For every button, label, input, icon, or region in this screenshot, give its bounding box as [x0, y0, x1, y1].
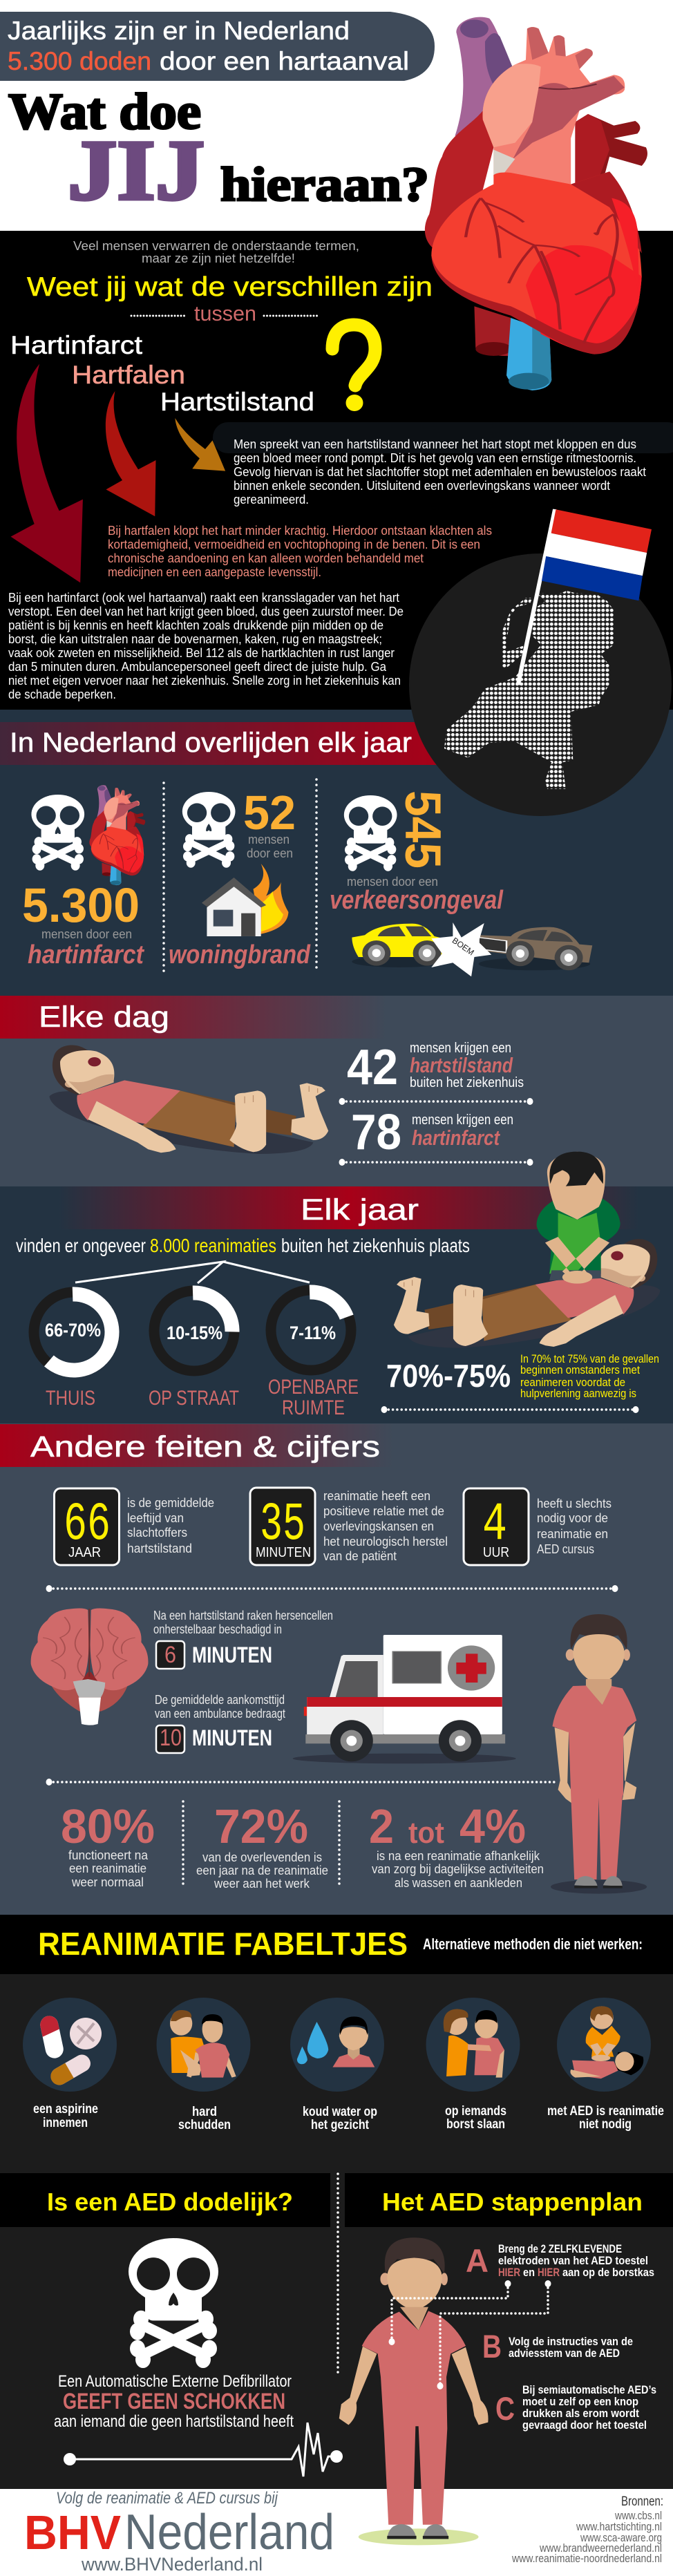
text: ambulance arrival: van een ambulance bedraagt: [155, 1707, 285, 1721]
icon: dotted map of the Netherlands: [444, 591, 614, 789]
stat: 2 tot 4%: als wassen en aankleden: [395, 1876, 522, 1890]
text block: hartinfarct: Bij een hartinfarct (ook wel hartaanval) raakt een kransslagader van het hart: [8, 591, 399, 605]
stat: 80%: weer normaal: [71, 1875, 144, 1889]
dotted divider: [381, 1406, 638, 1413]
logo: BHVNederland: [24, 2505, 334, 2560]
arrow: to hartinfarct text: [11, 364, 83, 583]
background: black AED heading strip right: [345, 2173, 673, 2227]
icon: small heart: [89, 785, 145, 885]
fact text: resuscitation start: het neurologisch herstel: [323, 1535, 448, 1549]
arrow: to hartstilstand text: [175, 418, 225, 471]
donut chart: thuis: [34, 1292, 114, 1372]
illustration: person lying on back: [49, 1045, 328, 1154]
step A: Breng de 2 ZELFKLEVENDE: [498, 2242, 622, 2255]
illustration: CPR on person: [394, 1152, 661, 1348]
icon: Dutch flag on pole: [516, 509, 652, 685]
icon: burning house: [202, 864, 288, 936]
number: 5.300: 5.300: [22, 878, 140, 932]
text block: hartfalen: [108, 524, 492, 579]
donut chart: openbare ruimte: 7-11%: [290, 1323, 336, 1343]
cause: verkeersongeval: verkeersongeval: [330, 886, 504, 915]
step C: [495, 2383, 656, 2432]
myth label: aspirine: een aspirine: [33, 2102, 98, 2116]
stat: 2 tot 4%: 4%: [459, 1799, 526, 1853]
myth label: AED: niet nodig: [579, 2117, 632, 2132]
vertical dotted divider: [336, 2174, 339, 2377]
myth circle: aspirine: [23, 1998, 117, 2092]
sources: [511, 2494, 663, 2565]
fact: 35 minuten: MINUTEN: [256, 1545, 311, 1560]
caption: mensen door een: [41, 927, 132, 941]
background: navy yearly panel: [0, 1186, 673, 1423]
myth circle: AED: [557, 1998, 651, 2092]
sentence: resuscitations per year: 8.000 reanimaties: [150, 1235, 276, 1256]
time box: 10 minuten: MINUTEN: [192, 1725, 272, 1750]
stat: 2 tot 4%: tot: [408, 1816, 444, 1850]
stat: 72%: 72%: [214, 1799, 308, 1853]
arrow: to hartfalen text: [106, 391, 155, 516]
stat: 78 hartinfarct: [351, 1105, 513, 1160]
fact text: course length: nodig voor de: [537, 1511, 608, 1525]
stat: 70%-75%: 70%-75%: [386, 1358, 511, 1394]
myth label: aspirine: [33, 2102, 98, 2130]
step C: drukken als erom wordt: [522, 2407, 639, 2420]
label: openbare ruimte: RUIMTE: [282, 1396, 345, 1419]
stat: 2 tot 4%: 2: [369, 1799, 394, 1853]
dark pill behind hartstilstand text: [213, 422, 673, 453]
label: openbare ruimte: OPENBARE: [268, 1376, 359, 1399]
connector lines: [75, 1262, 310, 1283]
main title: JIJ: [68, 123, 205, 218]
stat: 80%: functioneert na: [68, 1848, 149, 1862]
heading banner: deaths per year: [0, 722, 442, 765]
illustration: standing nurse: [551, 1614, 647, 1894]
number: 78: 78: [351, 1105, 401, 1160]
stat: 72%: van de overlevenden is: [202, 1850, 322, 1864]
label: op straat: OP STRAAT: [149, 1387, 239, 1410]
heading: In Nederland overlijden elk jaar: In Nederland overlijden elk jaar: [10, 728, 412, 758]
main title: Wat doe: [8, 84, 201, 140]
vertical dotted dividers: [183, 1801, 339, 1888]
step A: en: [523, 2266, 535, 2279]
step B: Volg de instructies van de: [509, 2335, 633, 2348]
stat: 2 tot 4%: van zorg bij dagelijkse activiteiten: [372, 1862, 544, 1876]
banner line two rest: door een hartaanval: [160, 47, 409, 75]
time box: 6 minuten: [156, 1641, 272, 1669]
icon: two people shaking: [170, 2010, 236, 2078]
text: bystanders start CPR: hulpverlening aanwezig is: [520, 1387, 636, 1400]
stat: 80%: een reanimatie: [69, 1862, 146, 1875]
text block: hartstilstand: geen bloed meer rond pompt. Dit is het gevolg van een ernstige ritmestoornis.: [234, 451, 636, 465]
fact: 66 jaar: [54, 1488, 119, 1565]
text: bystanders start CPR: reanimeren voordat de: [520, 1376, 625, 1389]
text block: hartinfarct: dan 5 minuten duren. Ambulancepersoneel geeft direct de juiste hulp. Ga: [8, 660, 387, 674]
stat: 72%: weer aan het werk: [214, 1877, 310, 1891]
text block: hartstilstand: Men spreekt van een hartstilstand wanneer het hart stopt met kloppen en dus: [234, 437, 636, 451]
fact text: resuscitation start: [323, 1489, 448, 1563]
fact text: resuscitation start: van de patiënt: [323, 1549, 397, 1563]
myth label: koud water: koud water op: [303, 2105, 377, 2119]
myth label: AED: [547, 2104, 664, 2132]
time box: 10 minuten: 10: [160, 1725, 182, 1751]
header banner: [0, 12, 435, 81]
stat column: verkeersongeval: [330, 790, 592, 976]
text block: hartstilstand: gereanimeerd.: [234, 493, 309, 506]
text block: hartfalen: Bij hartfalen klopt het hart minder krachtig. Hierdoor ontstaan klachten als: [108, 524, 492, 538]
fact text: age: is de gemiddelde: [127, 1496, 214, 1510]
myth label: schudden: [178, 2105, 231, 2132]
sources: www.cbs.nl: [614, 2509, 662, 2522]
illustration: brain: [31, 1608, 148, 1725]
caption: mensen: [248, 833, 290, 846]
sentence: resuscitations per year: [16, 1235, 470, 1256]
dotted divider: [339, 1159, 533, 1166]
footer: course invitation: Volg de reanimatie & AED cursus bij: [56, 2489, 278, 2508]
step A: A: [466, 2242, 489, 2279]
number: 42: 42: [347, 1040, 398, 1095]
fact text: age: slachtoffers: [127, 1526, 187, 1540]
icon: person hitting chest: [444, 2009, 504, 2078]
stat: 80%: [61, 1799, 155, 1889]
number: 545 rotated: 545: [395, 790, 451, 869]
myth label: borst slaan: op iemands: [445, 2104, 506, 2119]
dotted divider: [339, 1098, 533, 1105]
stat column: woningbrand: [169, 786, 311, 969]
heading: Is een AED dodelijk?: Is een AED dodelijk?: [47, 2188, 293, 2216]
caption: [247, 833, 293, 860]
spotlight circle: [409, 553, 672, 816]
stat: 42 hartstilstand: [347, 1040, 524, 1095]
background: white header: [0, 0, 673, 231]
term: Hartinfarct: Hartinfarct: [10, 331, 143, 359]
fact text: age: [127, 1496, 214, 1555]
sentence: resuscitations per year: vinden er ongeveer: [16, 1235, 146, 1256]
stat: 2 tot 4%: [369, 1799, 544, 1890]
text: ambulance arrival: [155, 1693, 285, 1721]
step B: B: [482, 2328, 502, 2365]
myth label: koud water: [303, 2105, 377, 2132]
text block: hartstilstand: binnen enkele seconden. Uitsluitend een overlevingskans wanneer wordt: [234, 479, 610, 493]
icon: red and white capsule: [39, 2014, 65, 2060]
caption: door een: [247, 846, 293, 860]
sentence: resuscitations per year: buiten het ziekenhuis plaats: [281, 1235, 470, 1256]
fact: 4 uur: 4: [482, 1495, 507, 1555]
description: mensen krijgen een: [410, 1041, 511, 1056]
icon: CPR scene: [570, 2006, 643, 2078]
illustration: ambulance: [293, 1635, 516, 1763]
stat: 2 tot 4%: is na een reanimatie afhankelijk: [377, 1849, 540, 1863]
highlight: geeft geen schokken: GEEFT GEEN SCHOKKEN: [63, 2389, 285, 2414]
fact text: age: leeftijd van: [127, 1511, 184, 1525]
cause: woningbrand: woningbrand: [169, 940, 311, 969]
cause: hartinfarct: [412, 1126, 500, 1150]
cause: hartstilstand: [410, 1053, 513, 1077]
time box: 6 minuten: 6: [164, 1642, 176, 1668]
fact: 4 uur: UUR: [483, 1545, 509, 1560]
heading: Het AED stappenplan: Het AED stappenplan: [382, 2188, 643, 2216]
step C: gevraagd door het toestel: [522, 2418, 647, 2432]
tussen with dotted lines: tussen: [194, 301, 256, 325]
donut chart: thuis: 66-70%: [45, 1320, 101, 1341]
intro text: [73, 239, 359, 265]
text block: hartfalen: kortademigheid, vermoeidheid en vochtophoping in de benen. Dit is een: [108, 538, 480, 551]
text: brain damage: [153, 1609, 333, 1636]
intro text: Veel mensen verwarren de onderstaande termen,: [73, 239, 359, 253]
icon: large skull: [129, 2238, 218, 2368]
stat: 72%: een jaar na de reanimatie: [196, 1864, 328, 1877]
logo: BHVNederland: BHV: [24, 2506, 121, 2559]
text: brain damage: Na een hartstilstand raken hersencellen: [153, 1609, 333, 1622]
electrode leader lines: [388, 2280, 551, 2389]
text block: hartinfarct: [8, 591, 404, 701]
text block: hartinfarct: verstopt. Een deel van het hart krijgt geen bloed, dus geen zuurstof meer. De: [8, 605, 404, 618]
fact: 66 jaar: JAAR: [68, 1545, 101, 1560]
fact text: course length: reanimatie en: [537, 1527, 608, 1541]
term: Hartstilstand: Hartstilstand: [160, 388, 314, 416]
icon: round tablet: [70, 2018, 102, 2049]
background: black AED heading strip left: [0, 2173, 330, 2227]
sources: Bronnen:: [621, 2494, 663, 2509]
text block: hartinfarct: borst, die kan uitstralen naar de bovenarmen, kaken, rug en maagstreek;: [8, 632, 382, 646]
fact: 66 jaar: 66: [64, 1495, 111, 1555]
label: openbare ruimte: [268, 1376, 359, 1419]
step A: HIER: [498, 2266, 520, 2279]
fact text: course length: [537, 1497, 612, 1556]
stat: 72%: [196, 1799, 328, 1891]
caption: mensen door een: [347, 875, 438, 889]
heading: Andere feiten & cijfers: Andere feiten & cijfers: [30, 1430, 380, 1464]
myth label: schudden: hard: [192, 2105, 217, 2119]
myth circle: koud water: [290, 1998, 384, 2092]
myth label: borst slaan: [445, 2104, 506, 2132]
description: mensen krijgen een: [412, 1112, 513, 1128]
fact: 35 minuten: [250, 1488, 315, 1565]
myth label: koud water: het gezicht: [311, 2118, 370, 2132]
background: navy deaths panel: [0, 710, 673, 996]
closing line: aan iemand die geen hartstilstand heeft: [54, 2412, 294, 2431]
step A: elektroden van het AED toestel: [498, 2254, 648, 2267]
label: BOEM: BOEM: [451, 936, 476, 958]
text: bystanders start CPR: [520, 1352, 659, 1400]
fact text: resuscitation start: positieve relatie met de: [323, 1504, 444, 1518]
step C: moet u zelf op een knop: [522, 2395, 638, 2408]
step A: aan op de borstkas: [562, 2266, 654, 2279]
heading banner: Elke dag: [0, 996, 387, 1039]
logo: BHVNederland: Nederland: [124, 2505, 334, 2560]
time box: 10 minuten: [156, 1725, 272, 1753]
step C: C: [495, 2390, 515, 2427]
fact: 35 minuten: 35: [260, 1495, 305, 1555]
icon: anatomical heart: [425, 17, 647, 390]
text: ambulance arrival: De gemiddelde aankomsttijd: [155, 1693, 285, 1707]
step A: [466, 2242, 654, 2279]
heading: Elke dag: Elke dag: [39, 1001, 169, 1034]
time box: 6 minuten: MINUTEN: [192, 1642, 272, 1667]
icon: ECG heartbeat line: [64, 2423, 343, 2476]
icon: yellow question mark: [332, 325, 375, 411]
icon: orange and pink capsule: [48, 2052, 93, 2088]
icon: water drops and face: [297, 2016, 375, 2067]
text block: hartinfarct: niet met eigen vervoer naar het ziekenhuis. Snelle zorg in het ziekenhuis kan: [8, 674, 401, 688]
main title: [8, 84, 429, 218]
main title: hieraan?: [220, 158, 429, 211]
heading: Elk jaar: Elk jaar: [301, 1193, 419, 1227]
text: AED explanation: [54, 2372, 294, 2431]
background: black myths heading strip: [0, 1915, 673, 1974]
banner line two highlight: 5.300 doden: [8, 47, 151, 75]
myth label: aspirine: innemen: [43, 2116, 88, 2130]
icon: skull: [31, 795, 84, 871]
step B: adviesstem van de AED: [509, 2347, 620, 2360]
illustration: body with electrode positions: [339, 2237, 489, 2545]
fact text: course length: heeft u slechts: [537, 1497, 612, 1510]
myth label: schudden: schudden: [178, 2118, 231, 2132]
myth label: borst slaan: borst slaan: [446, 2117, 505, 2132]
background: dark myths and AED panel: [0, 1974, 673, 2489]
fact text: course length: AED cursus: [537, 1542, 594, 1556]
step A: HIER: [538, 2266, 560, 2279]
myth circle: borst slaan: [426, 1998, 520, 2092]
dotted divider: [46, 1585, 618, 1592]
stat column: hartinfarct: [22, 785, 145, 969]
heading banner: Elk jaar: [59, 1186, 639, 1229]
background: white footer: [0, 2489, 673, 2576]
cause: hartinfarct: hartinfarct: [28, 940, 144, 969]
background: slate daily panel: [0, 996, 673, 1186]
text block: hartinfarct: vaak ook zweten en misselijkheid. Bel 112 als de hartklachten in rust langer: [8, 646, 395, 660]
label: thuis: THUIS: [46, 1387, 95, 1410]
fact text: resuscitation start: reanimatie heeft een: [323, 1489, 430, 1503]
background: slate facts panel: [0, 1423, 673, 1915]
heading banner: Andere feiten: [0, 1424, 394, 1467]
text: AED explanation: Een Automatische Externe Defibrillator: [58, 2372, 292, 2391]
fact text: resuscitation start: overlevingskansen en: [323, 1519, 434, 1533]
term: Hartfalen: Hartfalen: [72, 361, 185, 389]
donut chart: op straat: 10-15%: [167, 1323, 222, 1343]
text block: hartstilstand: [234, 437, 646, 506]
step B: [482, 2328, 633, 2365]
dotted divider: [46, 1779, 558, 1786]
text: brain damage: onherstelbaar beschadigd in: [153, 1622, 282, 1636]
text block: hartstilstand: Gevolg hiervan is dat het slachtoffer stopt met ademhalen en bewusteloos raakt: [234, 465, 646, 479]
icon: skull: [182, 792, 236, 868]
number: 52: 52: [243, 786, 296, 840]
donut chart: openbare ruimte: [271, 1290, 351, 1370]
icon: car crash: [352, 922, 592, 976]
footer: website: www.BHVNederland.nl: [81, 2554, 263, 2575]
vertical dotted divider: [164, 779, 316, 972]
intro text: maar ze zijn niet hetzelfde!: [142, 252, 295, 265]
text block: hartfalen: chronische aandoening en kan alleen worden behandeld met: [108, 551, 424, 565]
heading: differences: Weet jij wat de verschillen zijn: [27, 272, 433, 302]
donut chart: op straat: [154, 1291, 234, 1371]
text block: hartinfarct: de schade beperken.: [8, 688, 116, 701]
location: buiten het ziekenhuis: [410, 1075, 524, 1090]
text block: hartinfarct: patiënt is bij kennis en heeft klachten zoals drukkende pijn midden op de: [8, 618, 383, 632]
banner line one: Jaarlijks zijn er in Nederland: [8, 17, 350, 45]
text block: hartfalen: medicijnen en een aangepaste levensstijl.: [108, 565, 321, 579]
text: bystanders start CPR: beginnen omstanders met: [520, 1363, 640, 1376]
myth circle: schudden: [156, 1998, 250, 2092]
icon: skull: [344, 795, 397, 871]
fact text: age: hartstilstand: [127, 1542, 192, 1555]
fact: 4 uur: [464, 1488, 529, 1565]
heading: REANIMATIE FABELTJES: REANIMATIE FABELTJES: [38, 1926, 408, 1962]
background: black intro panel: [0, 231, 673, 710]
stat: 80%: 80%: [61, 1799, 155, 1853]
